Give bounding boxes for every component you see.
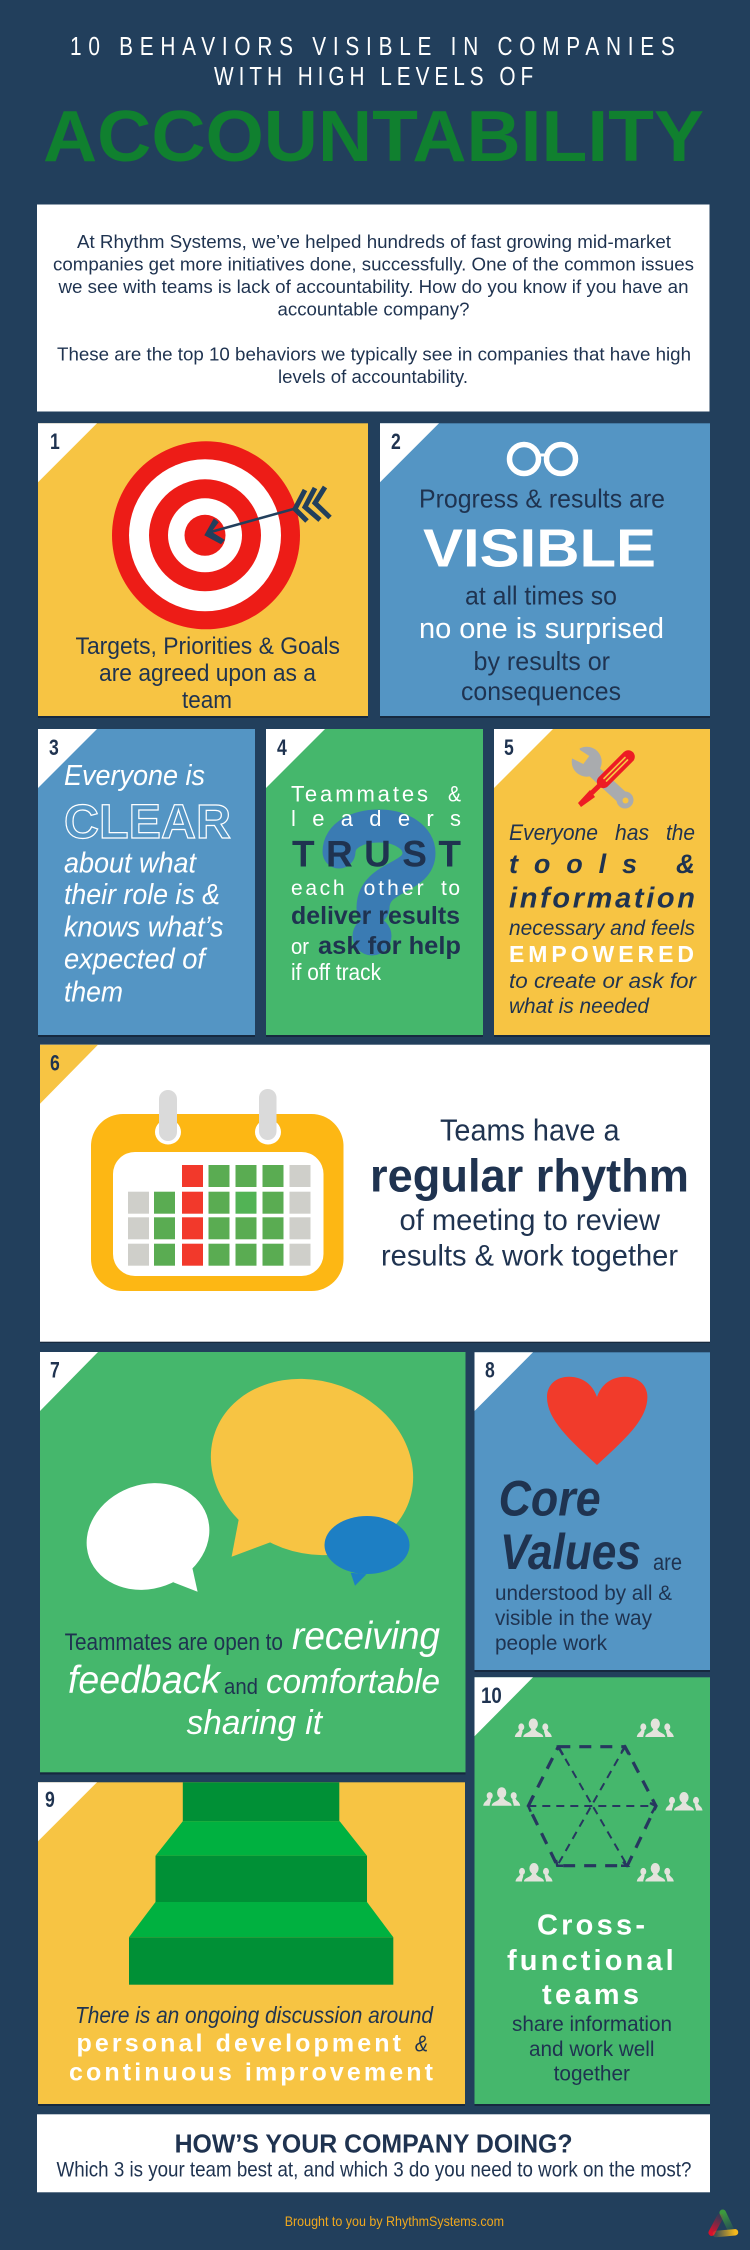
panel 7: feedback: Teammates are open to <box>65 1629 283 1656</box>
panel 9: development: There is an ongoing discussion around <box>75 2002 434 2028</box>
panel 2: visible <box>380 423 710 718</box>
panel 4: trust: if off track <box>291 959 381 985</box>
panel 4: trust: other <box>364 877 424 900</box>
panel 4: trust: & <box>448 782 461 807</box>
icon: heart <box>547 1377 647 1465</box>
panel 3: clear <box>38 729 255 1037</box>
icon: people groups <box>483 1718 702 1882</box>
panel 2: visible: no one is surprised <box>419 613 664 645</box>
panel 5: tools: necessary and feels <box>509 917 695 940</box>
panel 10: cross-functional teams: share information <box>512 2013 672 2036</box>
panel 5: tools: has <box>615 820 649 845</box>
icon: target with arrow <box>112 441 330 629</box>
panel 4: trust: ask for help <box>318 932 461 960</box>
panel 6: rhythm: regular rhythm <box>370 1150 689 1202</box>
panel 8: core values: understood by all & <box>495 1582 672 1605</box>
panel 5: tools: information <box>509 883 695 915</box>
panel 1: targets: are agreed upon as a <box>99 660 317 687</box>
panel 6: rhythm: of meeting to review <box>400 1204 660 1237</box>
panel 10: cross-functional teams: and work well <box>529 2038 654 2061</box>
panel 10: cross-functional teams: functional <box>507 1945 674 1977</box>
panel 1: targets: 1 <box>50 430 60 455</box>
panel 7: feedback: and <box>224 1674 258 1699</box>
panel 7: feedback: comfortable <box>266 1663 440 1701</box>
panel 7: feedback: receiving <box>292 1615 440 1658</box>
panel 4: trust: each <box>291 877 344 900</box>
panel 5: tools: the <box>666 820 695 845</box>
panel 6: rhythm: results & work together <box>381 1240 678 1273</box>
panel 7: feedback: 7 <box>50 1359 60 1383</box>
panel 1: targets: team <box>182 687 232 714</box>
panel 5: tools <box>494 729 710 1037</box>
panel 2: visible: consequences <box>461 676 621 706</box>
panel 3: clear: their role is & <box>64 879 220 911</box>
panel 1: targets <box>38 423 368 718</box>
panel 8: core values: 8 <box>485 1359 495 1383</box>
panel 2: visible: at all times so <box>465 581 617 611</box>
panel 4: trust: leaders <box>291 806 461 831</box>
panel 4: trust: Teammates <box>291 782 428 807</box>
icon: hexagon network <box>528 1747 656 1866</box>
icon: speech bubbles <box>71 1351 438 1607</box>
title: ACCOUNTABILITY <box>43 97 704 177</box>
panel 2: visible: Progress & results are <box>419 484 665 514</box>
panel 6: rhythm: Teams have a <box>440 1113 620 1148</box>
panel 3: clear: 3 <box>49 736 59 761</box>
panel: intro: we see with teams is lack of accountability. How do you know if you have an <box>57 276 689 297</box>
panel 7: feedback <box>40 1351 466 1774</box>
panel 8: core values: Core <box>499 1471 601 1527</box>
panel: intro: At Rhythm Systems, we’ve helped hundreds of fast growing mid-market <box>77 231 671 252</box>
panel 7: feedback: feedback <box>68 1659 222 1702</box>
panel 4: trust: 4 <box>277 736 287 761</box>
panel 4: trust <box>266 729 483 1037</box>
panel 9: development: & <box>415 2031 428 2057</box>
panel: intro: companies get more initiatives done, successfully. One of the common issues <box>53 254 694 274</box>
panel 3: clear: knows what’s <box>64 912 224 944</box>
panel 2: visible: by results or <box>474 646 610 676</box>
panel: intro <box>37 204 710 412</box>
panel: intro: accountable company? <box>278 298 470 320</box>
panel 5: tools: Everyone <box>509 820 598 845</box>
panel: call to action <box>37 2114 710 2192</box>
panel 9: development: continuous improvement <box>69 2059 434 2087</box>
title <box>43 32 704 177</box>
title: WITH HIGH LEVELS OF <box>214 62 533 91</box>
panel 5: tools: what is needed <box>509 995 650 1018</box>
panel 8: core values <box>474 1352 710 1672</box>
panel 8: core values: Values <box>500 1524 641 1580</box>
panel 6: rhythm <box>40 1045 710 1343</box>
panel 4: trust: TRUST <box>292 834 461 875</box>
panel 10: cross-functional teams: Cross- <box>537 1909 645 1941</box>
panel 5: tools: to create or ask for <box>509 970 697 993</box>
panel 4: trust: or <box>291 934 309 959</box>
panel 2: visible: 2 <box>391 430 401 455</box>
panel 8: core values: people work <box>495 1632 607 1655</box>
panel 10: cross-functional teams <box>474 1677 710 2106</box>
icon: glasses <box>510 444 576 474</box>
title: 10 BEHAVIORS VISIBLE IN COMPANIES <box>70 32 675 61</box>
icon: calendar <box>91 1089 344 1291</box>
panel 7: feedback: sharing it <box>187 1704 324 1742</box>
panel 9: development: 9 <box>45 1788 55 1813</box>
panel 10: cross-functional teams: together <box>554 2063 630 2086</box>
panel: intro: These are the top 10 behaviors we typically see in companies that have high <box>57 344 691 364</box>
icon: stairs <box>129 1782 393 1985</box>
panel 9: development: personal development <box>76 2030 402 2058</box>
panel 4: trust: deliver results <box>291 902 460 930</box>
panel 3: clear: Everyone is <box>64 760 205 792</box>
panel 3: clear: them <box>64 977 123 1009</box>
panel 3: clear: expected of <box>64 944 208 976</box>
panel: intro: levels of accountability. <box>278 366 468 387</box>
panel: call to action: HOW’S YOUR COMPANY DOING? <box>175 2129 573 2159</box>
panel 5: tools: & <box>676 849 695 879</box>
panel 1: targets: Targets, Priorities & Goals <box>76 633 340 660</box>
panel 10: cross-functional teams: teams <box>542 1979 639 2011</box>
panel 6: rhythm: 6 <box>50 1052 60 1076</box>
panel 9: development <box>38 1782 465 2106</box>
panel 3: clear: about what <box>64 848 198 880</box>
panel 10: cross-functional teams: 10 <box>481 1685 502 1708</box>
panel 5: tools: EMPOWERED <box>509 941 694 967</box>
footer credit: Brought to you by RhythmSystems.com <box>285 2213 504 2229</box>
panel 5: tools: 5 <box>504 736 514 761</box>
panel 3: clear: CLEAR <box>64 796 231 849</box>
icon: question mark <box>339 826 419 956</box>
panel 8: core values: are <box>653 1549 682 1575</box>
icon: rhythm logo <box>712 2213 735 2234</box>
panel 5: tools: tools <box>509 849 637 879</box>
panel 2: visible: VISIBLE <box>423 519 656 579</box>
panel 4: trust: to <box>441 877 460 900</box>
panel: call to action: Which 3 is your team best at, and which 3 do you need to work on the most? <box>56 2159 691 2182</box>
panel 8: core values: visible in the way <box>495 1607 652 1630</box>
icon: wrench and screwdriver <box>566 741 634 808</box>
